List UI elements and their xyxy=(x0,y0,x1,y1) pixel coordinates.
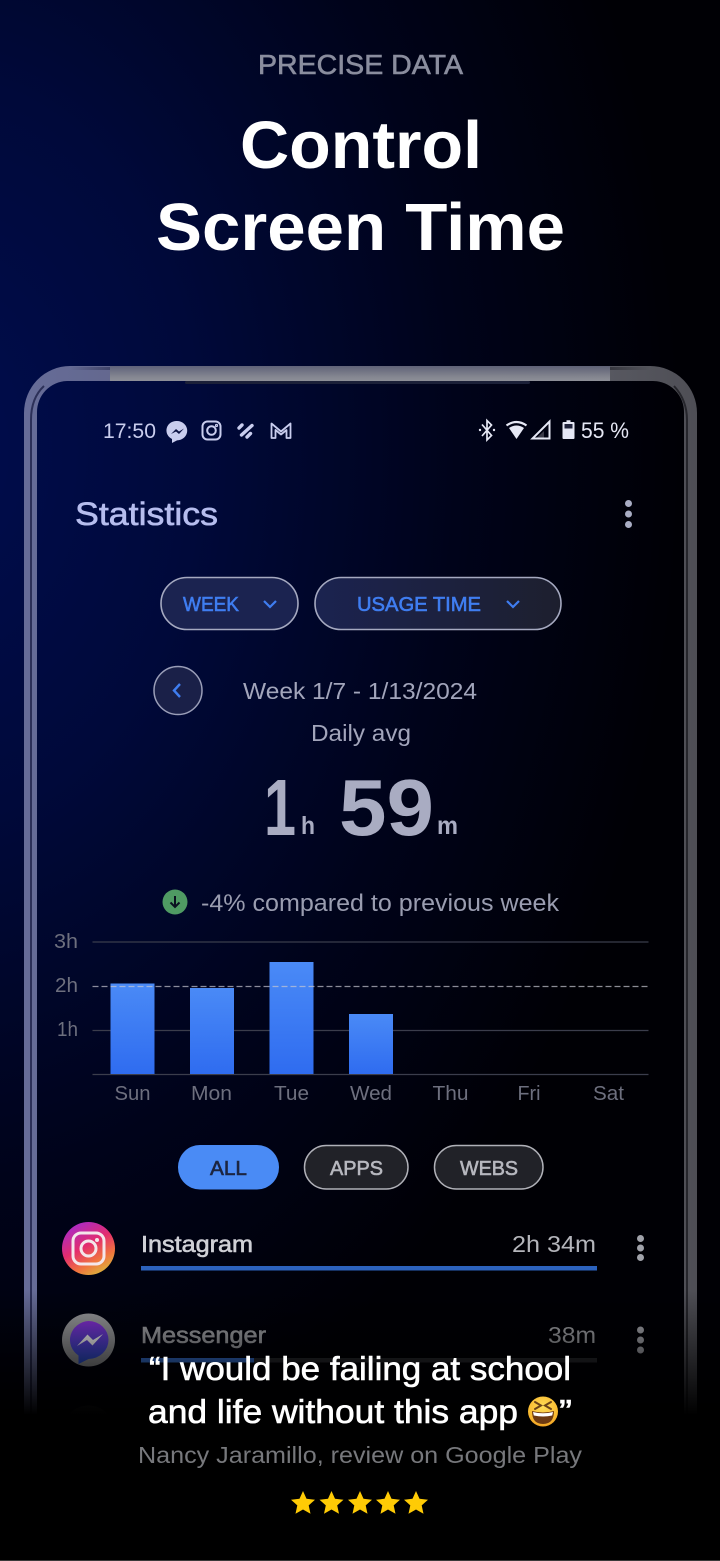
icon: heart stripes xyxy=(239,425,252,437)
y axis labels: 3h xyxy=(54,930,78,953)
icon: laughing emoji xyxy=(528,1396,558,1426)
icon: bluetooth xyxy=(479,420,495,440)
button: previous week xyxy=(154,666,202,714)
y axis labels: 1h xyxy=(57,1018,78,1041)
clock: 17:50 xyxy=(103,420,156,443)
y axis labels xyxy=(54,930,78,1041)
icon: overflow menu xyxy=(625,500,632,528)
phone frame xyxy=(24,366,697,1420)
daily average value: h xyxy=(301,812,315,840)
x axis labels xyxy=(114,1082,624,1105)
solid bottom area xyxy=(0,1415,720,1561)
filter: WEBS xyxy=(434,1146,543,1189)
dropdown: WEEK: WEEK xyxy=(183,594,240,616)
review attribution: Nancy Jaramillo, review on Google Play xyxy=(138,1442,582,1468)
icon: messenger xyxy=(62,1314,115,1366)
dropdown: WEEK xyxy=(161,578,298,630)
app row: Instagram: 2h 34m xyxy=(512,1231,596,1257)
daily avg label: Daily avg xyxy=(311,720,411,746)
app row: Messenger: Messenger xyxy=(141,1322,266,1348)
dropdown: USAGE TIME: USAGE TIME xyxy=(357,594,481,616)
bars xyxy=(110,962,393,1074)
bar chart xyxy=(54,930,648,1105)
icon: overflow menu xyxy=(637,1326,644,1354)
status bar right xyxy=(479,418,629,443)
x axis labels: Tue xyxy=(274,1082,309,1105)
app row: Instagram xyxy=(62,1222,644,1275)
app row: Messenger: 38m xyxy=(548,1322,596,1348)
x axis labels: Fri xyxy=(518,1082,540,1105)
app row: Messenger xyxy=(62,1314,644,1366)
icon: instagram xyxy=(62,1222,115,1275)
icon: overflow menu xyxy=(637,1235,644,1261)
y axis labels: 2h xyxy=(55,974,78,997)
testimonial xyxy=(138,1351,582,1514)
icon: signal xyxy=(532,422,550,438)
filter: ALL xyxy=(178,1145,279,1190)
icon: battery xyxy=(562,420,574,439)
filter: APPS xyxy=(304,1146,408,1189)
bottom fade overlay xyxy=(0,1290,720,1415)
filter: APPS: APPS xyxy=(330,1158,383,1180)
status bar left xyxy=(103,420,290,443)
icon: instagram xyxy=(202,422,220,440)
x axis labels: Mon xyxy=(191,1082,232,1105)
x axis labels: Wed xyxy=(350,1082,392,1105)
quote line 2: and life without this app xyxy=(148,1394,518,1431)
x axis labels: Sat xyxy=(593,1082,624,1105)
screen header: Statistics: Statistics xyxy=(75,496,218,532)
x axis labels: Sun xyxy=(114,1082,150,1105)
daily average value: m xyxy=(437,812,458,840)
closing quote: ” xyxy=(559,1394,572,1431)
icon: gmail xyxy=(272,424,290,438)
eyebrow: PRECISE DATA: PRECISE DATA xyxy=(258,49,463,80)
five star rating xyxy=(291,1491,428,1514)
icon: messenger xyxy=(166,421,187,443)
icon: down arrow badge xyxy=(162,890,188,914)
comparison to previous week: -4% compared to previous week xyxy=(201,890,560,917)
filter: ALL: ALL xyxy=(210,1158,247,1180)
date range: Week 1/7 - 1/13/2024 xyxy=(243,678,477,704)
daily average value xyxy=(264,763,458,852)
icon: wifi xyxy=(506,422,526,439)
dropdown: USAGE TIME xyxy=(315,578,561,630)
filter: WEBS: WEBS xyxy=(460,1158,518,1180)
title line 2: Screen Time xyxy=(156,190,565,265)
battery percent: 55 % xyxy=(581,418,629,443)
app row: faded third app icon xyxy=(62,1406,115,1458)
x axis labels: Thu xyxy=(432,1082,468,1105)
daily average value: 1 xyxy=(264,763,296,852)
quote line 1: “I would be failing at school xyxy=(149,1351,571,1388)
title line 1: Control xyxy=(240,108,482,183)
heading group xyxy=(156,49,565,265)
daily average value: 59 xyxy=(339,763,434,852)
app row: Instagram: Instagram xyxy=(141,1231,253,1257)
